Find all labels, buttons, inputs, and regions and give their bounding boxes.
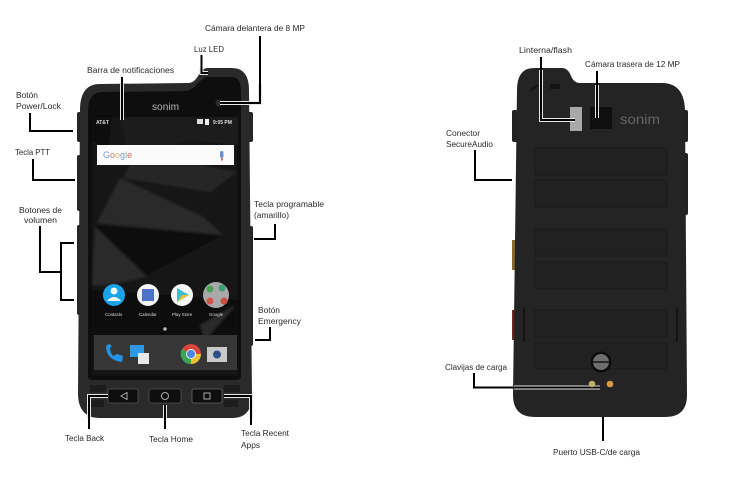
callout: Botón Power/Lock: Botón [16,90,38,100]
callout: Cámara delantera de 8 MP: Cámara delantera de 8 MP [205,23,305,33]
google folder: Google [209,312,224,317]
callout: Botones de volumen: volumen [24,215,57,225]
speaker grilles [90,385,240,407]
callout: Tecla Home: Tecla Home [149,434,193,444]
callout: Barra de notificaciones [87,65,174,120]
callout: Linterna/flash [519,45,575,120]
callout: Botón Emergency: Emergency [258,316,302,326]
app icons [103,282,229,317]
callout: Barra de notificaciones: Barra de notificaciones [87,65,174,75]
callout: Tecla programable [254,199,324,239]
callout: Linterna/flash: Linterna/flash [519,45,572,55]
charging pins [589,381,613,387]
callout: Tecla Back: Tecla Back [65,433,105,443]
front phone [77,68,253,418]
callout: Clavijas de carga [445,362,600,388]
rear body [513,68,687,417]
phone body [78,68,252,418]
status bar: AT&T [96,120,109,126]
callout: Puerto USB-C/de carga: Puerto USB-C/de carga [553,447,640,457]
flash [570,107,582,131]
status bar [96,119,232,126]
status bar: 9:05 PM [213,120,232,126]
callout: Clavijas de carga: Clavijas de carga [445,362,507,372]
contacts: Contacts [105,312,123,317]
callout: Puerto USB-C/de carga [553,417,640,457]
callout: Tecla Back [65,396,108,443]
callout: Tecla Recent Apps: Tecla Recent [241,428,290,438]
callout: Botones de volumen: Botones de [19,205,62,215]
callout: Tecla programable: Tecla programable [254,199,324,209]
side buttons [77,112,253,346]
callout: Conector SecureAudio [446,128,512,180]
callout: Tecla PTT [15,147,75,180]
google search bar [97,145,234,165]
brand: sonim [152,101,179,113]
callout: Conector SecureAudio: Conector [446,128,480,138]
google search bar: Google [103,150,132,160]
callout: Cámara trasera de 12 MP [585,59,680,118]
callout: Tecla Recent Apps: Apps [241,440,260,450]
rear brand: sonim [620,111,660,127]
dock [94,335,237,370]
play store: Play Store [172,312,193,317]
rear camera [590,107,612,129]
callout: Tecla Recent Apps [224,396,290,450]
callout: Cámara trasera de 12 MP: Cámara trasera de 12 MP [585,59,680,69]
calendar: Calendar [139,312,157,317]
screw [590,352,612,372]
home chevron [163,327,167,331]
callout: Botón Emergency: Botón [258,305,280,315]
callout: Botón Emergency [255,305,302,340]
callout: Luz LED [194,44,224,73]
callout: Tecla programable: (amarillo) [254,210,289,220]
callout: Luz LED: Luz LED [194,44,224,54]
rear notches [523,84,678,342]
rear phone [512,68,688,417]
callout: Tecla Home [149,405,193,444]
callout: Botón Power/Lock: Power/Lock [16,101,62,111]
hardware keys [108,389,222,403]
callout: Botón Power/Lock [16,90,73,131]
screen wallpaper [92,117,238,375]
callout: Conector SecureAudio: SecureAudio [446,139,493,149]
rear side buttons [512,110,688,340]
rear panels [535,148,667,369]
bezel [88,77,241,380]
front camera lens [216,100,222,106]
callout: Cámara delantera de 8 MP [205,23,305,103]
callout: Tecla PTT: Tecla PTT [15,147,51,157]
callout: Botones de volumen [19,205,74,300]
